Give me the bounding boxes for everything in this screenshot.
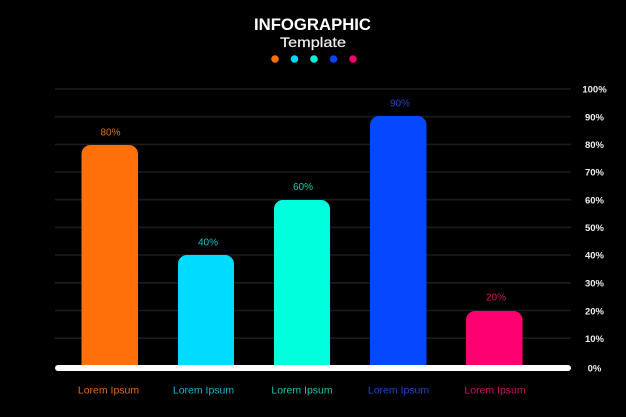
bar: 20% pink: Lorem Ipsum	[464, 384, 526, 396]
bar: 40% cyan: Lorem Ipsum	[173, 384, 234, 396]
bar: 80% orange: Lorem Ipsum	[78, 384, 139, 396]
bar: 60% turquoise: Lorem Ipsum	[271, 384, 333, 396]
bar: 80% orange: 80%	[100, 128, 121, 138]
y-axis labels	[582, 84, 607, 374]
bar: 60% turquoise: 60%	[293, 182, 313, 193]
bar: 40% cyan: 40%	[198, 238, 218, 248]
y-axis labels: 10%	[585, 334, 605, 345]
bar: 20% pink	[464, 292, 526, 396]
y-axis labels: 90%	[585, 112, 605, 124]
bar: 40% cyan	[173, 238, 234, 396]
grid lines	[55, 89, 571, 338]
y-axis labels: 30%	[585, 278, 605, 290]
y-axis labels: 80%	[585, 140, 605, 151]
y-axis labels: 20%	[585, 306, 605, 318]
legend dots	[271, 55, 357, 63]
bar: 90% blue: 90%	[390, 98, 410, 110]
y-axis labels: 40%	[585, 250, 605, 262]
y-axis labels: 70%	[585, 168, 605, 178]
bar: 90% blue: Lorem Ipsum	[368, 384, 429, 396]
bar: 20% pink: 20%	[486, 292, 506, 304]
bar: 90% blue	[368, 98, 429, 396]
y-axis labels: 50%	[585, 223, 605, 234]
baseline axis	[55, 365, 571, 371]
y-axis labels: 0%	[588, 364, 602, 374]
bar: 80% orange	[78, 128, 139, 396]
title: Template	[280, 34, 346, 50]
bar: 60% turquoise	[271, 182, 333, 396]
y-axis labels: 60%	[585, 196, 605, 206]
title: INFOGRAPHIC	[254, 15, 371, 34]
y-axis labels: 100%	[582, 84, 607, 96]
title	[254, 15, 371, 50]
